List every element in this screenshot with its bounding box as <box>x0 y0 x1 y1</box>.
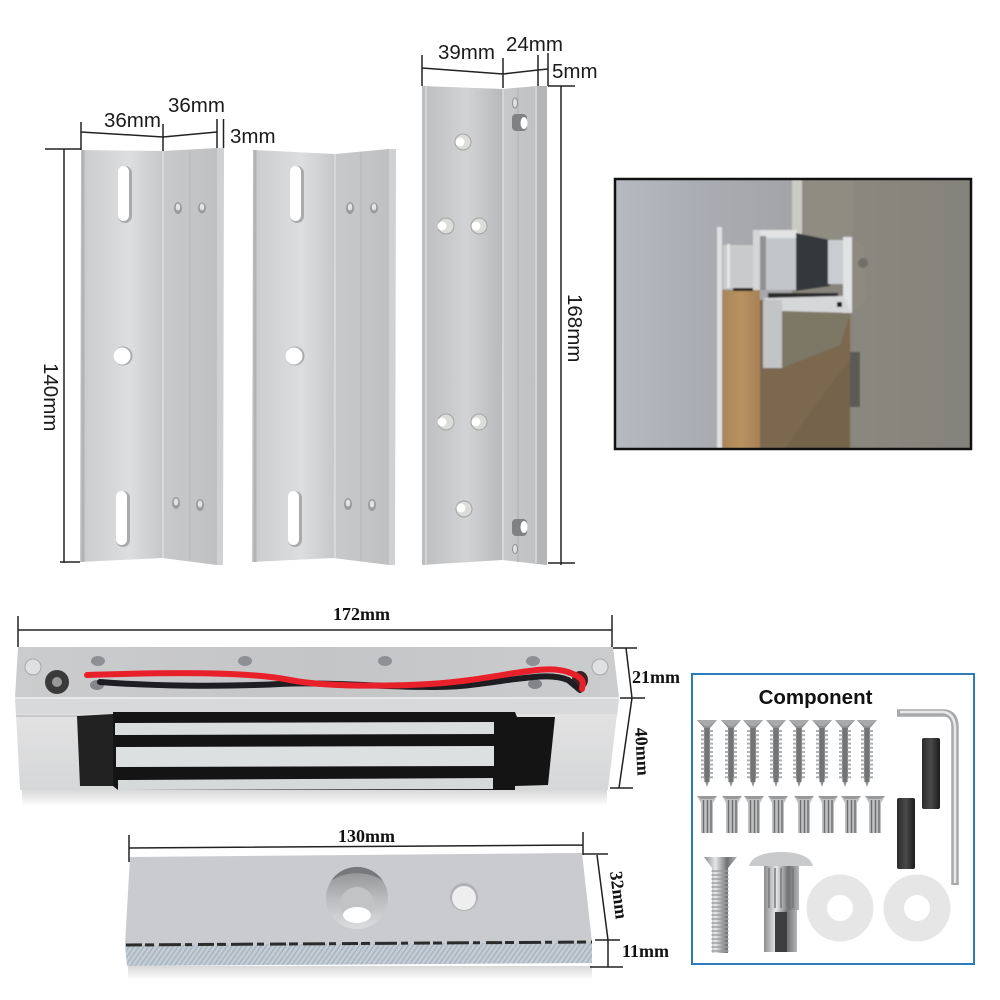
label: 5mm: 5mm <box>552 60 598 83</box>
label: 36mm right: 36mm <box>168 94 225 117</box>
white washers <box>806 874 950 942</box>
photo scene <box>610 175 975 455</box>
plate shadow <box>128 966 592 980</box>
dimension lines <box>18 615 645 788</box>
label: 11mm: 11mm <box>622 941 669 961</box>
label: 21mm: 21mm <box>632 667 680 687</box>
bracket 3 dimension lines <box>422 53 575 565</box>
label: 140mm: 140mm <box>39 363 62 431</box>
large bolt <box>704 857 737 953</box>
lock drop shadow <box>22 790 607 806</box>
panel: component kit <box>692 674 974 964</box>
bracket 1 dimension lines <box>45 119 224 563</box>
panel frame <box>692 674 974 964</box>
countersunk hole <box>326 867 388 929</box>
bracket 3 body <box>422 86 547 565</box>
label: 130mm: 130mm <box>338 826 395 846</box>
small hole <box>450 883 478 911</box>
label: 172mm: 172mm <box>333 604 390 624</box>
wires <box>87 669 583 690</box>
bracket 2 <box>252 149 396 565</box>
black pins <box>897 738 940 869</box>
hex key <box>897 712 955 885</box>
label: 40mm: 40mm <box>631 727 653 776</box>
label: 3mm: 3mm <box>230 125 276 148</box>
long tapping screws <box>697 720 877 787</box>
bracket 3 with dimensions <box>422 33 598 565</box>
magnetic lock with dimensions <box>15 604 680 806</box>
dome rivet <box>749 852 813 952</box>
label: 32mm: 32mm <box>606 870 632 920</box>
lock body <box>15 647 619 790</box>
label: 24mm: 24mm <box>506 33 563 56</box>
plate body <box>125 853 592 966</box>
magnet core <box>77 712 555 790</box>
label: 39mm: 39mm <box>438 41 495 64</box>
mounting holes <box>25 656 608 694</box>
bracket 1 with dimensions <box>39 94 276 565</box>
bracket 1 body <box>80 148 224 565</box>
dimension lines <box>129 832 623 967</box>
armature plate with dimensions <box>125 826 669 980</box>
label: 36mm left: 36mm <box>104 109 161 132</box>
component heading: Component <box>759 686 873 709</box>
installation photo <box>610 175 975 455</box>
photo frame <box>615 179 971 449</box>
label: 168mm: 168mm <box>563 294 586 362</box>
short machine screws <box>697 796 885 833</box>
